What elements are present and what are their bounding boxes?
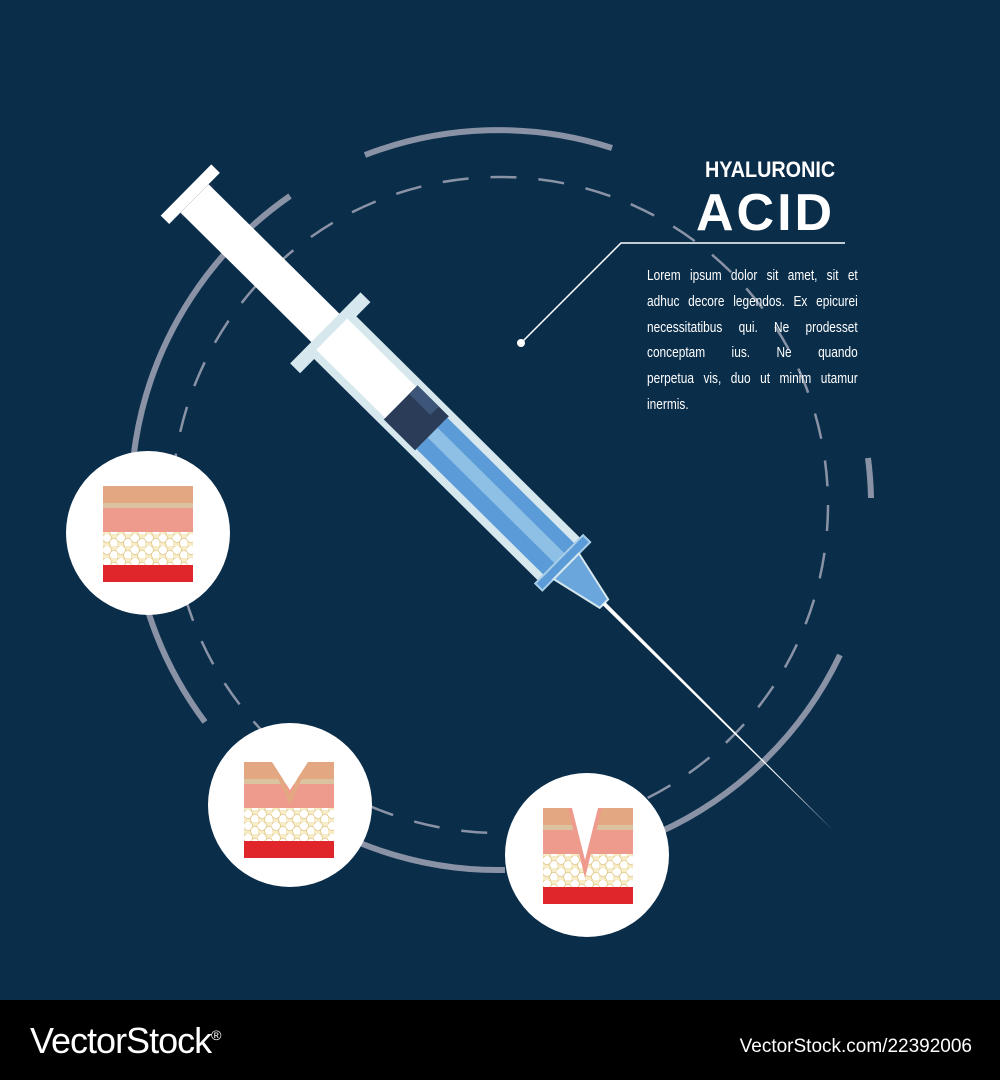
outer circle arcs xyxy=(131,130,871,870)
callout line xyxy=(517,243,845,347)
paragraph: conceptam ius. Ne quando xyxy=(647,345,858,361)
title: HYALURONIC xyxy=(705,157,835,182)
title big: ACID xyxy=(696,184,835,242)
footer: VectorStock.com/22392006 xyxy=(740,1036,972,1057)
paragraph: necessitatibus qui. Ne prodesset xyxy=(647,320,858,336)
footer xyxy=(0,1000,1000,1080)
paragraph: Lorem ipsum dolor sit amet, sit et xyxy=(647,268,858,284)
paragraph xyxy=(647,268,858,413)
paragraph: perpetua vis, duo ut minim utamur xyxy=(647,371,858,387)
dashed inner circle xyxy=(172,177,828,833)
paragraph: adhuc decore legendos. Ex epicurei xyxy=(647,294,858,310)
skin circle 1 xyxy=(66,451,230,615)
skin circle 3 xyxy=(505,773,669,937)
paragraph: inermis. xyxy=(647,397,689,413)
syringe xyxy=(151,154,869,867)
skin circle 2 xyxy=(208,723,372,887)
footer: VectorStock® xyxy=(30,1020,220,1061)
